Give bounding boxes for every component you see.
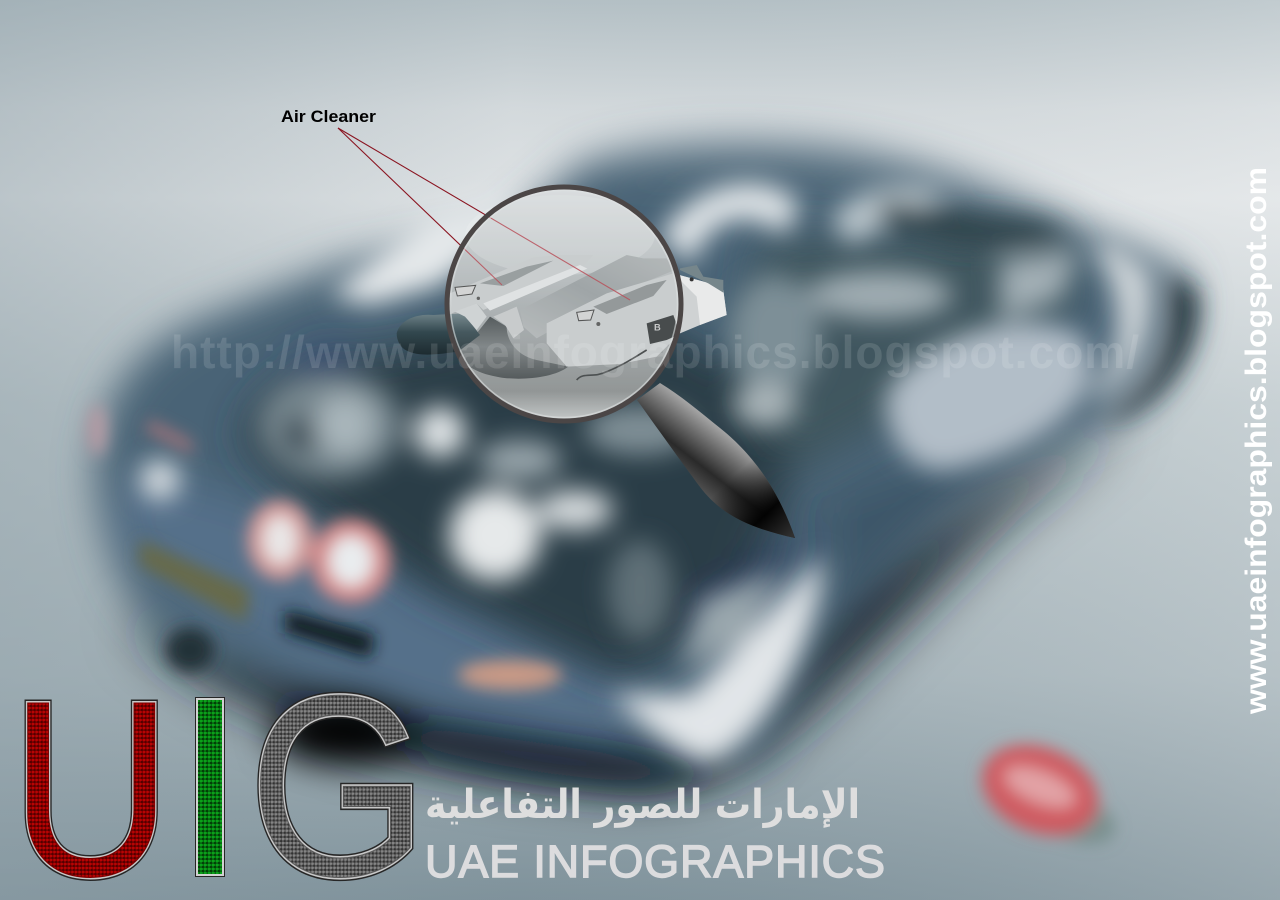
logo letters UIG [10, 642, 427, 900]
blurred car photo [87, 143, 1197, 855]
engine bay dark [240, 230, 1080, 680]
watermark url: http://www.uaeinfographics.blogspot.com/ [171, 326, 1139, 378]
lower intake hose [452, 315, 568, 379]
letter I [196, 698, 224, 876]
small badges [455, 285, 476, 296]
english title: UAE INFOGRAPHICS [425, 836, 885, 887]
vertical site address: www.uaeinfographics.blogspot.com [1240, 167, 1273, 715]
magnifier lens [449, 189, 679, 419]
car body [95, 143, 1188, 770]
car ground shadow [130, 420, 1130, 785]
air cleaner label: Air Cleaner [281, 108, 377, 126]
clamps [455, 303, 487, 330]
badge [969, 729, 1123, 855]
upper housing [450, 255, 593, 313]
centre tubes [520, 255, 675, 338]
air cleaner engine illustration: B [654, 323, 661, 333]
lens glass tint [449, 189, 679, 419]
scrawl detail [577, 350, 647, 380]
headlights and grille [87, 404, 562, 690]
magnifier handle [637, 383, 795, 538]
magnifier ring [447, 187, 681, 421]
left hose bend [397, 313, 480, 355]
light parts [330, 183, 1197, 762]
air cleaner engine illustration [397, 255, 727, 380]
black module [647, 315, 680, 344]
dark under-car shadow [260, 700, 730, 785]
arabic title: الإمارات للصور التفاعلية [425, 782, 860, 828]
callout leader lines [338, 128, 630, 300]
lower housing [547, 273, 727, 367]
